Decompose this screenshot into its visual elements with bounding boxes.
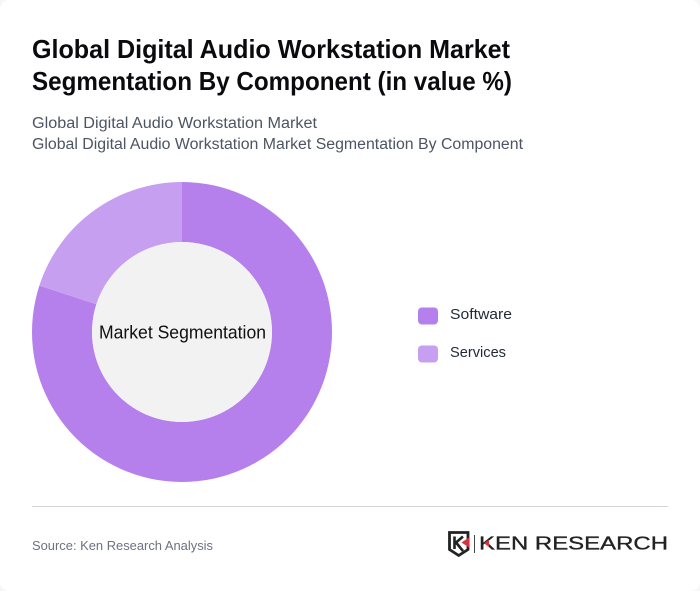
title: Segmentation By Component (in value %) xyxy=(32,66,512,96)
logo: Ken Research xyxy=(450,532,668,556)
centre label: Market Segmentation xyxy=(99,322,266,342)
donut centre xyxy=(92,242,272,422)
icon: shield xyxy=(450,532,469,556)
legend xyxy=(418,306,512,362)
source note: Source: Ken Research Analysis xyxy=(32,538,213,553)
segment: services 20% xyxy=(39,182,182,304)
subtitle xyxy=(32,115,524,153)
logo wordmark: KEN RESEARCH xyxy=(479,534,668,554)
subtitle: Global Digital Audio Workstation Market Segmentation By Component xyxy=(32,136,524,153)
segment: software 80% xyxy=(32,182,332,482)
legend item: software: Software xyxy=(450,306,512,323)
legend item: services: Services xyxy=(450,344,506,361)
title: Global Digital Audio Workstation Market xyxy=(32,34,510,64)
donut chart xyxy=(32,182,332,482)
title xyxy=(32,34,512,96)
subtitle: Global Digital Audio Workstation Market xyxy=(32,115,318,132)
